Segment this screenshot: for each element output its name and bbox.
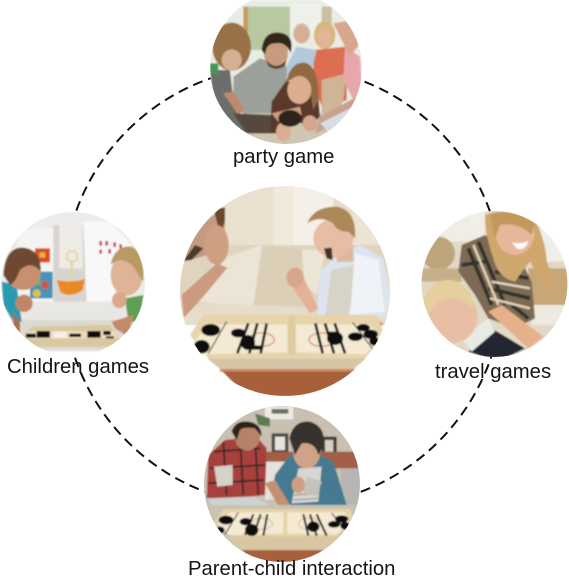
label: party game: party game xyxy=(233,146,334,168)
photo: father and son playing xyxy=(180,186,390,396)
panel: parent-child interaction xyxy=(188,404,395,579)
panel: party game xyxy=(205,0,370,168)
label: travel games: travel games xyxy=(435,361,551,383)
dashed connecting circle xyxy=(63,66,503,506)
panel: children games xyxy=(0,210,150,378)
panel: travel games xyxy=(418,208,569,383)
panel: center photo, father and son with game board xyxy=(180,186,390,396)
label: children games: Children games xyxy=(7,356,149,378)
photo: family playing together xyxy=(210,0,362,144)
photo: two adults reading with mugs xyxy=(200,404,367,564)
photo: mother and daughter laughing xyxy=(418,208,569,362)
photo: two children playing xyxy=(1,212,145,352)
